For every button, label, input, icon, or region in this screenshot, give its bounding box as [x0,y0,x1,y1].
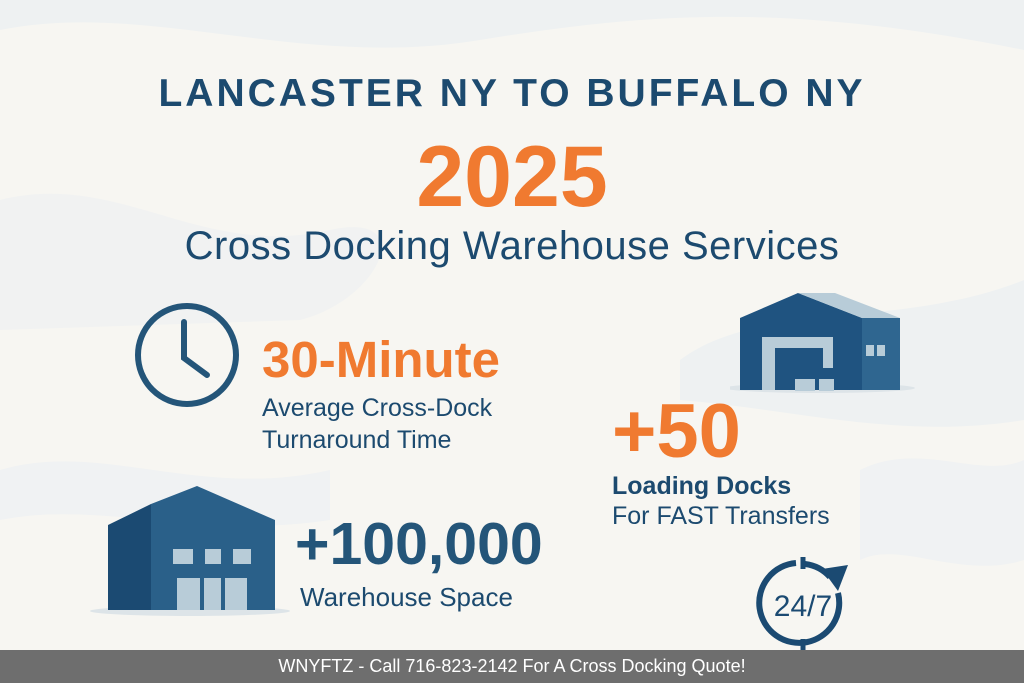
title: LANCASTER NY TO BUFFALO NY [158,72,866,115]
footer bar: WNYFTZ - Call 716-823-2142 For A Cross Docking Quote! [278,656,746,676]
stat: +100,000: Warehouse Space [300,582,513,612]
icon: warehouse bottom left [90,486,290,616]
stat: 30-minute: Average Cross-Dock [262,394,492,422]
icon: 24/7: 24/7 [774,590,832,623]
icon: warehouse top right [730,293,915,393]
footer bar [0,650,1024,683]
stat: 30-minute [262,331,500,454]
stat: 30-minute: 30-Minute [262,331,500,388]
stat: +100,000: +100,000 [295,511,543,577]
stat: 30-minute: Turnaround Time [262,426,451,454]
icon: 24/7 [756,557,848,650]
stat: +100,000 [295,511,543,612]
year: 2025 [416,129,608,225]
stat: +50 docks: +50 [612,389,741,474]
subtitle: Cross Docking Warehouse Services [185,224,839,268]
icon: clock [135,303,239,407]
stat: +50 docks [612,389,830,530]
stat: +50 docks: For FAST Transfers [612,502,830,530]
stat: +50 docks: Loading Docks [612,472,791,500]
